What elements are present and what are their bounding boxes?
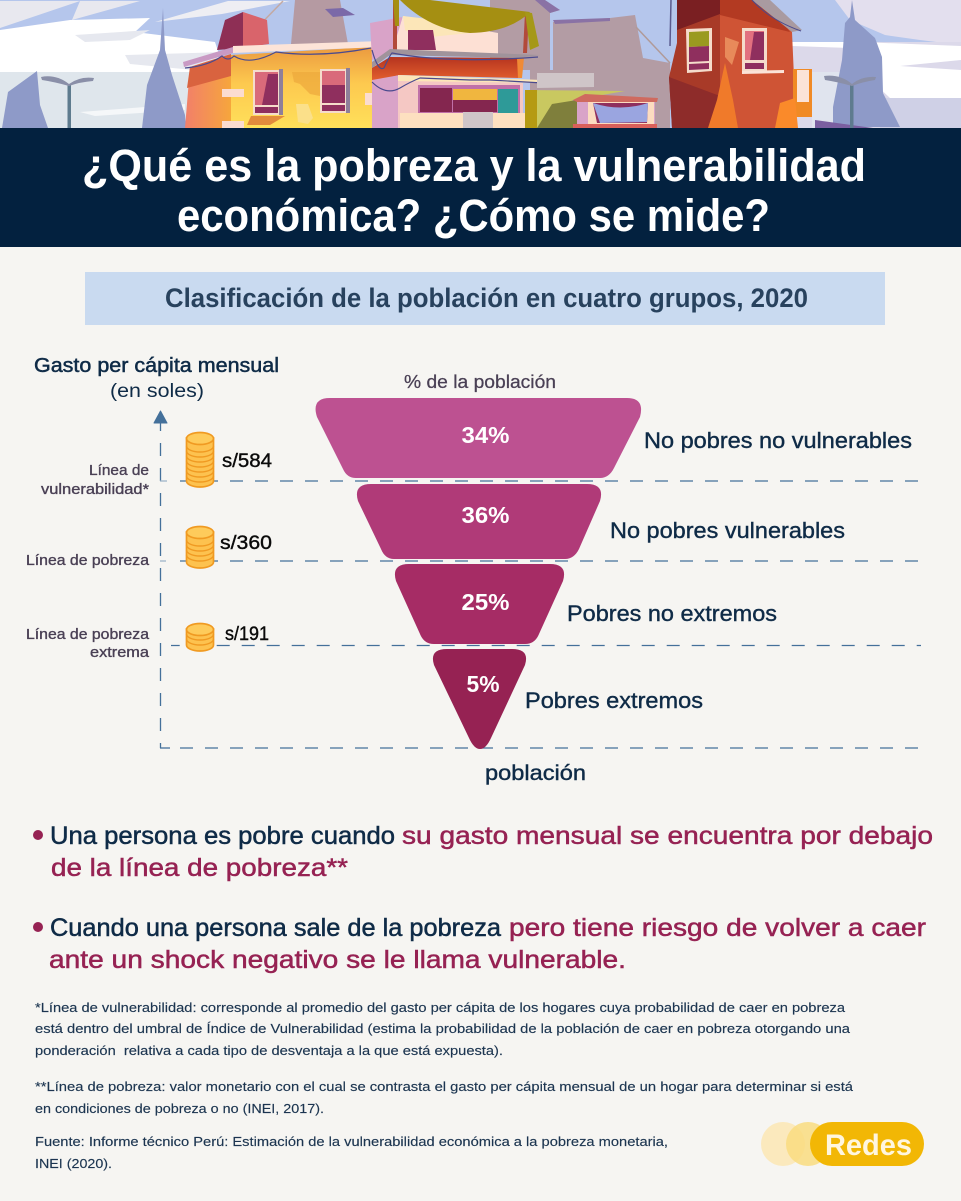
red brick house xyxy=(669,0,720,128)
back buildings xyxy=(291,0,348,44)
funnel chart: 25% xyxy=(462,589,510,615)
funnel group labels: No pobres vulnerables xyxy=(610,518,845,543)
threshold labels: extrema xyxy=(90,645,150,661)
y axis heading: Gasto per cápita mensual xyxy=(34,355,279,377)
footnote: poverty line: en condiciones de pobreza o no (INEI, 2017). xyxy=(35,1101,324,1116)
icon: coin stack s/191 xyxy=(186,624,214,651)
bullet: definition of vulnerable: Cuando una persona sale de la pobreza xyxy=(50,914,501,942)
funnel group labels xyxy=(525,428,912,713)
footnote: vulnerability line: ponderación relativa a cada tipo de desventaja a la que está expuesta). xyxy=(35,1043,503,1058)
title band xyxy=(0,128,961,247)
yellow house xyxy=(217,12,243,50)
logo: Redes xyxy=(761,1122,924,1166)
bullet: definition of poor: su gasto mensual se encuentra por debajo xyxy=(402,822,933,850)
funnel group labels: Pobres no extremos xyxy=(567,601,777,626)
funnel chart xyxy=(316,398,641,749)
title: ¿Qué es la pobreza y la vulnerabilidad xyxy=(82,140,866,191)
footnote: vulnerability line: *Línea de vulnerabilidad: corresponde al promedio del gasto per cápita de los hogares cuya probabilidad de caer en pobreza xyxy=(35,1000,846,1015)
grey block and green mound xyxy=(537,73,594,88)
footnote: vulnerability line xyxy=(35,1000,851,1058)
funnel group labels: Pobres extremos xyxy=(525,688,703,713)
source: INEI (2020). xyxy=(35,1156,112,1171)
threshold labels xyxy=(26,463,150,661)
x axis label: población xyxy=(485,762,586,785)
title xyxy=(82,140,866,241)
subtitle: Clasificación de la población en cuatro grupos, 2020 xyxy=(165,283,808,313)
threshold labels: Línea de xyxy=(89,463,149,479)
subtitle panel xyxy=(85,272,885,325)
source xyxy=(35,1134,668,1171)
coin values xyxy=(220,450,272,645)
coin values: s/584 xyxy=(222,450,272,472)
axis arrow xyxy=(154,411,167,423)
bullet: definition of poor: de la línea de pobreza** xyxy=(51,854,348,882)
bullet: definition of vulnerable: ante un shock negativo se le llama vulnerable. xyxy=(49,946,626,974)
threshold labels: Línea de pobreza xyxy=(26,553,150,569)
bullet: definition of poor xyxy=(33,822,933,882)
towers xyxy=(142,8,186,128)
bullet: definition of poor: Una persona es pobre cuando xyxy=(50,822,395,850)
funnel chart: 34% xyxy=(462,422,510,448)
source: Fuente: Informe técnico Perú: Estimación de la vulnerabilidad económica a la pobreza monetaria, xyxy=(35,1134,668,1149)
logo: Redes: Redes xyxy=(825,1129,912,1162)
funnel chart: 5% xyxy=(466,671,500,697)
icon: coin stack s/360 xyxy=(186,526,214,568)
header illustration: shanty town xyxy=(0,0,961,128)
bullet: definition of vulnerable: pero tiene riesgo de volver a caer xyxy=(509,914,926,942)
small house xyxy=(577,101,655,128)
funnel group labels: No pobres no vulnerables xyxy=(644,428,912,453)
coin values: s/191 xyxy=(225,623,269,645)
y axis heading xyxy=(34,355,279,402)
footnote: vulnerability line: está dentro del umbral de Índice de Vulnerabilidad (estima la probabilidad de la población de caer en pobreza otorgando una xyxy=(35,1021,851,1036)
coin values: s/360 xyxy=(220,532,272,554)
street lamps xyxy=(68,84,71,128)
axes and threshold lines xyxy=(160,423,921,748)
threshold labels: Línea de pobreza xyxy=(26,627,150,643)
pink middle house xyxy=(370,17,403,60)
icon: coin stack s/584 xyxy=(186,432,214,487)
funnel chart: 36% xyxy=(462,502,510,528)
footnote: poverty line xyxy=(35,1079,854,1116)
footnote: poverty line: **Línea de pobreza: valor monetario con el cual se contrasta el gasto per cápita mensual de un hogar para determinar si está xyxy=(35,1079,854,1094)
funnel heading: % de la población xyxy=(404,372,556,392)
title: económica? ¿Cómo se mide? xyxy=(177,190,770,241)
y axis heading: (en soles) xyxy=(110,381,204,402)
bullet: definition of vulnerable xyxy=(33,914,926,974)
threshold labels: vulnerabilidad* xyxy=(41,482,149,498)
